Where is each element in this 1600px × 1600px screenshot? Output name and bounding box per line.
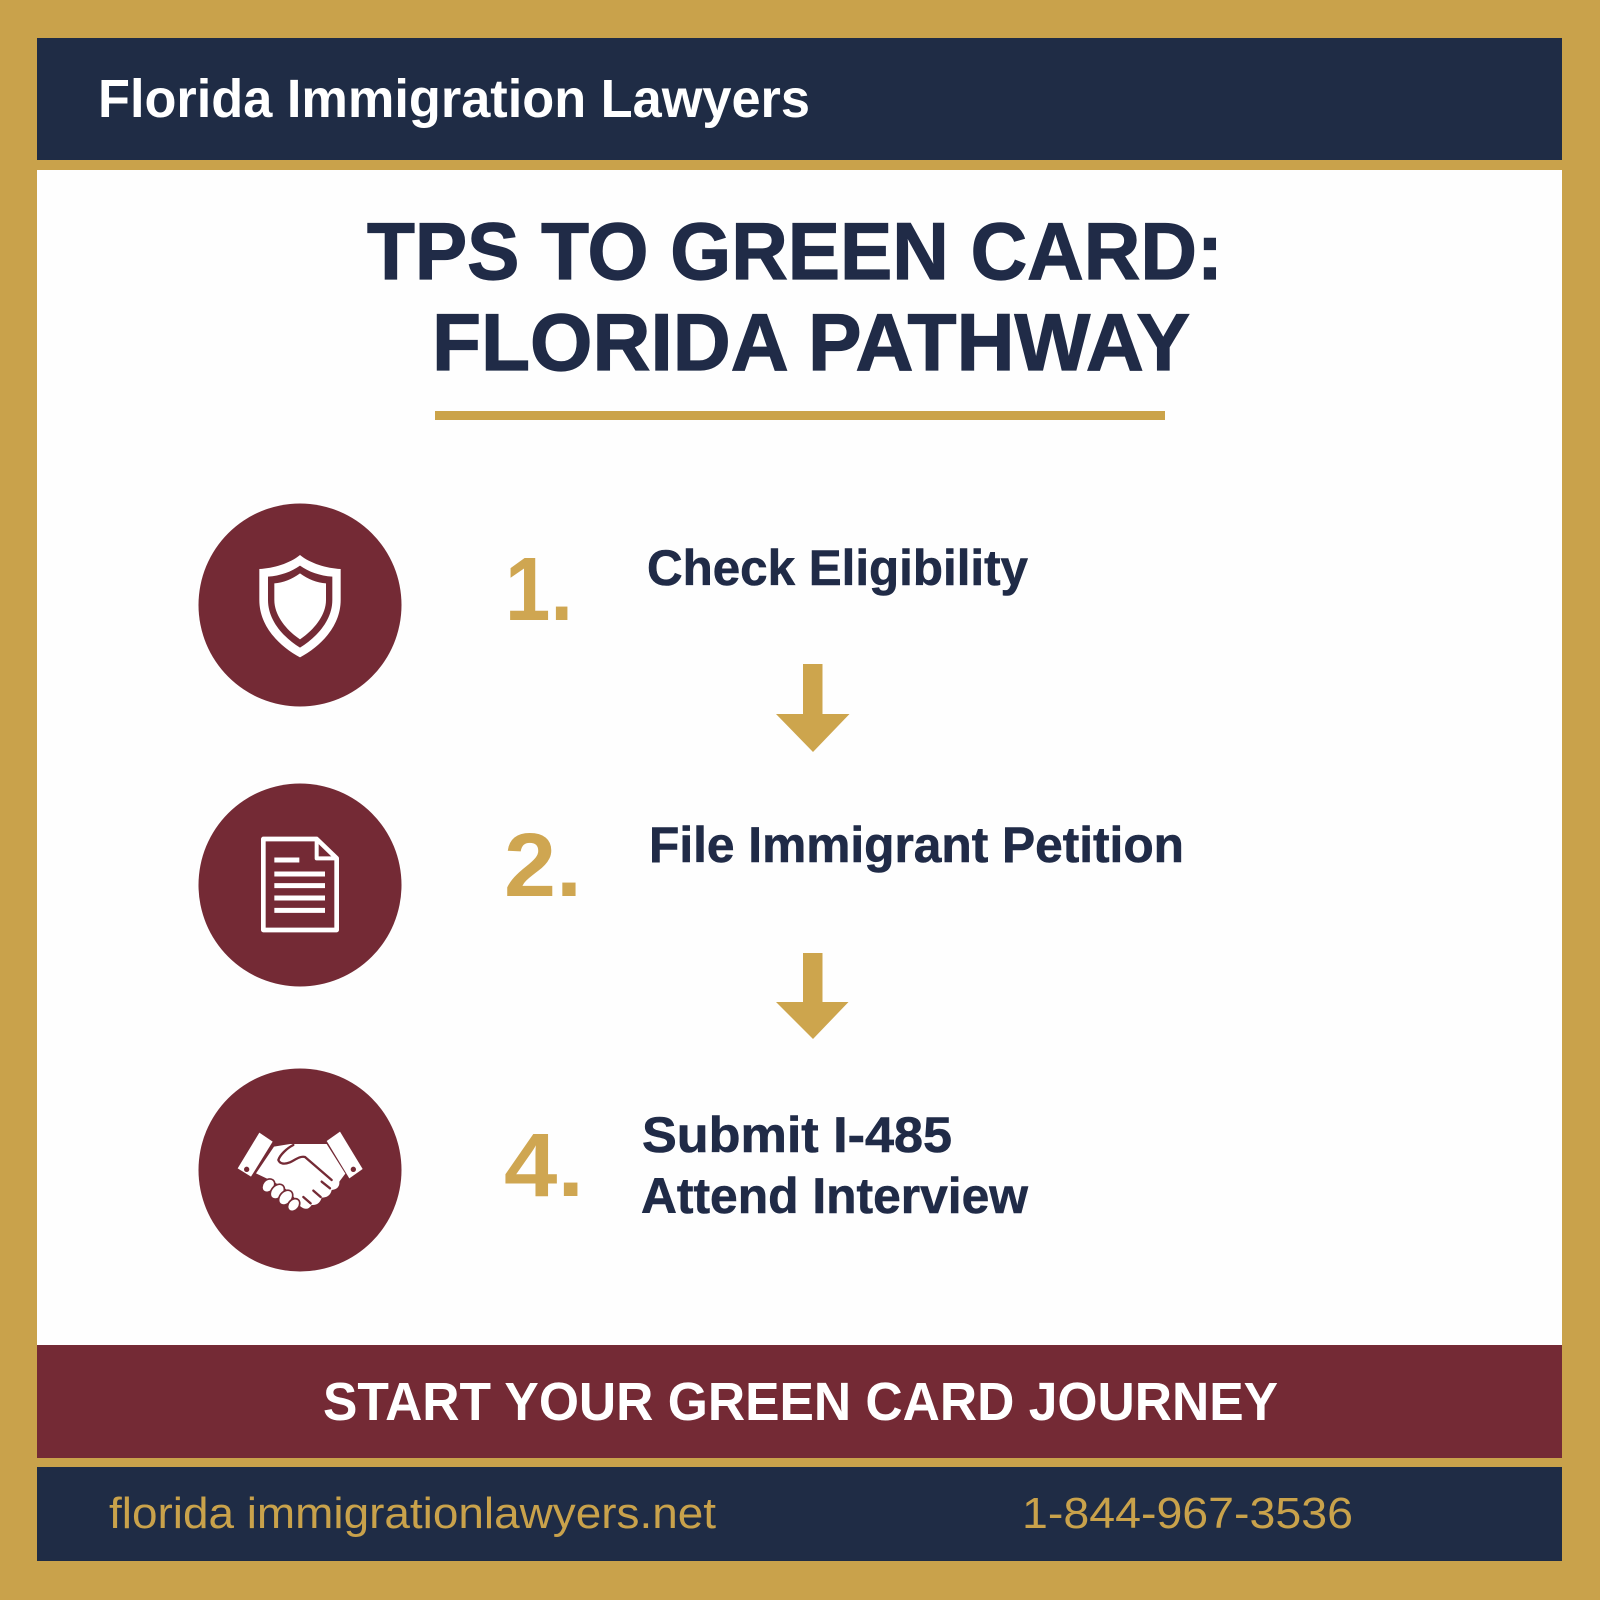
- arrow: step 1 to step 2: [776, 664, 850, 752]
- footer bar: [37, 1467, 1562, 1561]
- title: [367, 207, 1223, 388]
- header firm name: Florida Immigration Lawyers: [98, 69, 810, 129]
- footer website: florida immigrationlawyers.net: [109, 1489, 716, 1538]
- step text: submit and interview: Submit I-485: [642, 1107, 952, 1163]
- step number 1: 1.: [505, 540, 573, 640]
- icon: document: [198, 784, 402, 986]
- arrow: step 2 to step 4: [776, 953, 848, 1039]
- panel: white content area: [37, 170, 1562, 1345]
- step text: submit and interview: [641, 1107, 1028, 1224]
- step text: submit and interview: Attend Interview: [641, 1168, 1028, 1224]
- title: FLORIDA PATHWAY: [432, 298, 1190, 388]
- footer phone: 1-844-967-3536: [1022, 1489, 1353, 1538]
- step text: check eligibility: Check Eligibility: [647, 540, 1028, 596]
- step number 4: 4.: [504, 1116, 584, 1216]
- call to action banner: [37, 1345, 1562, 1458]
- banner text: START YOUR GREEN CARD JOURNEY: [323, 1372, 1278, 1432]
- step text: file immigrant petition: File Immigrant Petition: [649, 817, 1184, 873]
- icon: shield: [198, 504, 402, 706]
- step 4: [198, 1068, 1028, 1272]
- title: TPS TO GREEN CARD:: [367, 207, 1223, 297]
- icon: handshake: [198, 1068, 402, 1272]
- step 1: [198, 504, 1028, 706]
- step 2: [198, 784, 1184, 986]
- title underline: [435, 411, 1165, 420]
- header bar: [37, 38, 1562, 160]
- step number 2: 2.: [504, 816, 582, 916]
